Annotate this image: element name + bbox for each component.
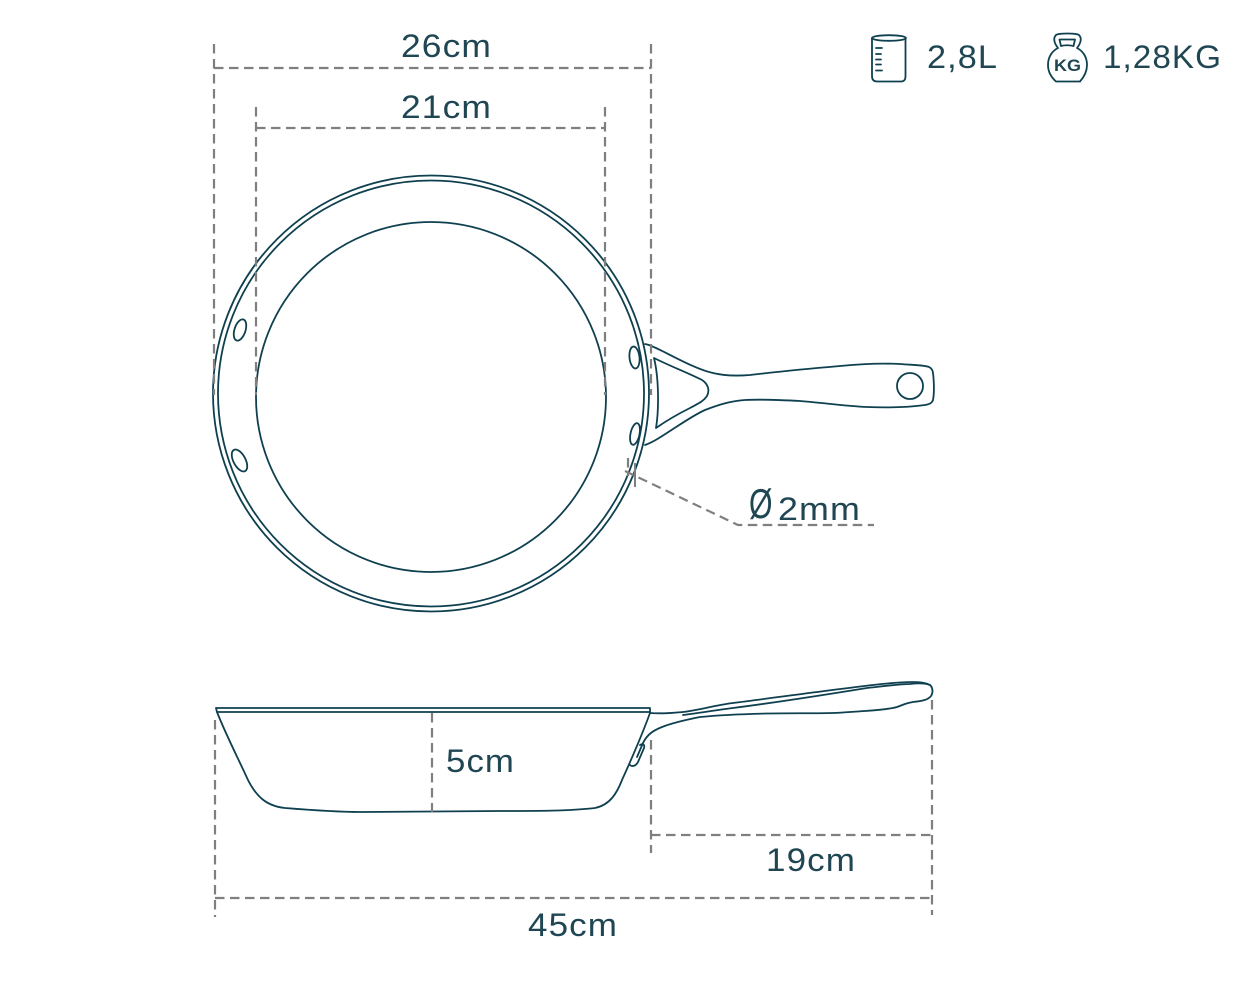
pan rim, side view: [216, 708, 650, 712]
capacity icon: beaker: [872, 35, 906, 82]
side view of pan: [216, 682, 932, 812]
45cm total length dimension: [215, 720, 932, 943]
weight icon: kettlebell: [1048, 34, 1087, 82]
45cm total length dimension: 45cm: [528, 907, 618, 943]
weight icon: kettlebell: KG: [1054, 56, 1081, 75]
19cm handle dimension: 19cm: [766, 842, 856, 878]
pan outer rim: [213, 176, 649, 612]
rivets: [229, 318, 642, 474]
5cm height dimension: 5cm: [446, 743, 515, 779]
2mm thickness callout: Ø: [749, 480, 773, 527]
pan base circle: [256, 222, 606, 572]
handle, top view: [645, 344, 934, 445]
handle, side view: [637, 682, 932, 757]
19cm handle dimension: [651, 700, 932, 878]
handle rivet, side view: [630, 744, 644, 766]
capacity value: 2,8L: [927, 39, 998, 75]
21cm dimension: [256, 89, 605, 395]
26cm dimension: 26cm: [401, 28, 492, 64]
2mm thickness callout: [625, 458, 874, 527]
weight value: 1,28KG: [1103, 39, 1222, 75]
26cm dimension: [214, 28, 651, 395]
5cm height dimension: [432, 713, 515, 812]
2mm thickness callout: 2mm: [778, 491, 861, 527]
21cm dimension: 21cm: [401, 89, 492, 125]
top view of pan: [213, 176, 934, 612]
pan body, side view: [217, 712, 650, 812]
